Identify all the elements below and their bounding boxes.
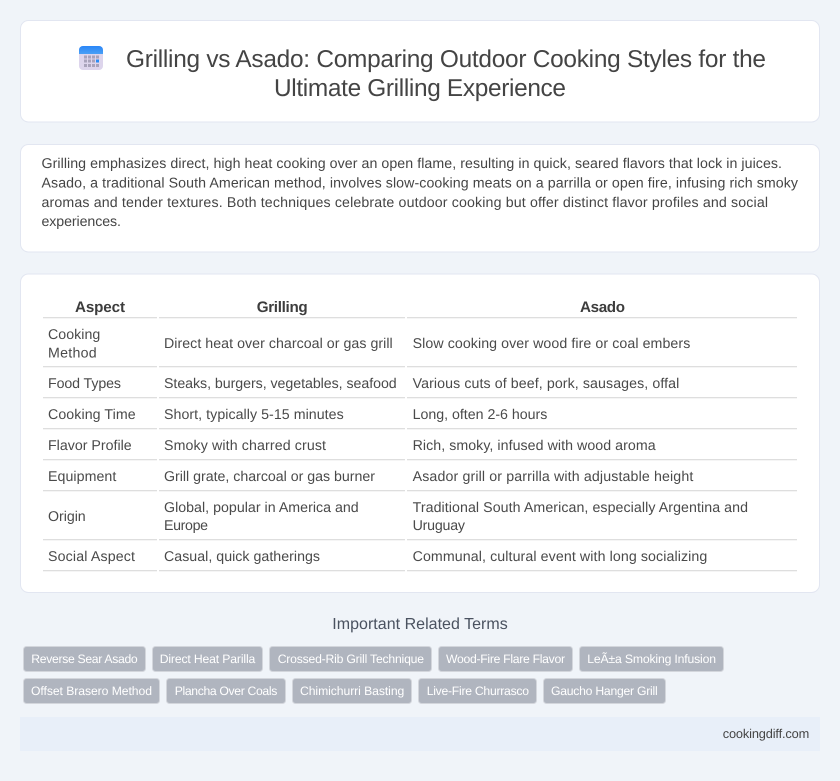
row: social aspect: Casual, quick gatherings bbox=[164, 549, 320, 565]
footer bar bbox=[20, 717, 820, 751]
tag: Chimichurri Basting bbox=[292, 678, 412, 704]
panel: introduction bbox=[20, 144, 820, 252]
tag: Crossed-Rib Grill Technique bbox=[270, 646, 432, 672]
row: social aspect bbox=[48, 549, 707, 565]
tag: Gaucho Hanger Grill: Gaucho Hanger Grill bbox=[551, 684, 658, 698]
panel: comparison table bbox=[20, 274, 820, 592]
panel: related term tags bbox=[24, 646, 724, 704]
text block: introduction paragraph: experiences. bbox=[42, 214, 121, 230]
row: food types: Food Types bbox=[48, 376, 121, 392]
tag: Reverse Sear Asado bbox=[24, 646, 146, 672]
tag: Crossed-Rib Grill Technique: Crossed-Rib Grill Technique bbox=[278, 652, 424, 666]
table grid lines bbox=[43, 317, 797, 571]
row: equipment: Grill grate, charcoal or gas burner bbox=[164, 469, 375, 485]
tag: Gaucho Hanger Grill bbox=[544, 678, 666, 704]
tag: Direct Heat Parilla: Direct Heat Parilla bbox=[160, 652, 256, 666]
title bbox=[126, 46, 766, 102]
tag: Plancha Over Coals bbox=[166, 678, 286, 704]
row: cooking time bbox=[48, 407, 547, 423]
tag: Reverse Sear Asado: Reverse Sear Asado bbox=[31, 652, 138, 666]
tag: Direct Heat Parilla bbox=[152, 646, 262, 672]
row: food types: Steaks, burgers, vegetables, seafood bbox=[164, 376, 397, 392]
row: origin: Europe bbox=[164, 518, 208, 534]
row: cooking method: Direct heat over charcoal or gas grill bbox=[164, 336, 393, 352]
row: cooking time: Cooking Time bbox=[48, 407, 136, 423]
table header row bbox=[75, 299, 625, 316]
row: social aspect: Social Aspect bbox=[48, 549, 135, 565]
row: flavor profile bbox=[48, 438, 656, 454]
panel: title header bbox=[20, 20, 820, 122]
row: flavor profile: Smoky with charred crust bbox=[164, 438, 326, 454]
row: food types: Various cuts of beef, pork, sausages, offal bbox=[413, 376, 679, 392]
row: origin bbox=[48, 500, 748, 534]
row: cooking method: Cooking bbox=[48, 327, 100, 343]
text block: introduction paragraph: aromas and tender textures. Both techniques celebrate outdoor cooking but offer distinct flavor profiles and social bbox=[42, 195, 768, 211]
tag: Plancha Over Coals: Plancha Over Coals bbox=[175, 684, 277, 698]
title: Ultimate Grilling Experience bbox=[274, 75, 566, 102]
row: equipment: Asador grill or parrilla with adjustable height bbox=[413, 469, 693, 485]
row: origin: Global, popular in America and bbox=[164, 500, 359, 516]
row: flavor profile: Rich, smoky, infused with wood aroma bbox=[413, 438, 656, 454]
row: equipment bbox=[48, 469, 693, 485]
row: social aspect: Communal, cultural event with long socializing bbox=[413, 549, 707, 565]
text block: introduction paragraph bbox=[42, 156, 799, 230]
tag: Leña Smoking Infusion bbox=[580, 646, 724, 672]
row: food types bbox=[48, 376, 679, 392]
table header row: Asado bbox=[580, 299, 625, 316]
tag: Live-Fire Churrasco: Live-Fire Churrasco bbox=[427, 684, 529, 698]
row: origin: Uruguay bbox=[413, 518, 466, 534]
row: cooking time: Short, typically 5-15 minutes bbox=[164, 407, 344, 423]
title: Grilling vs Asado: Comparing Outdoor Cooking Styles for the bbox=[126, 46, 766, 73]
row: cooking method bbox=[48, 327, 690, 362]
table header row: Aspect bbox=[75, 299, 125, 316]
footer source text: cookingdiff.com bbox=[723, 726, 809, 741]
tag: Chimichurri Basting: Chimichurri Basting bbox=[300, 684, 404, 698]
icon: calendar bbox=[79, 46, 103, 70]
row: origin: Traditional South American, especially Argentina and bbox=[413, 500, 748, 516]
tag: Leña Smoking Infusion: LeÃ±a Smoking Infusion bbox=[587, 652, 716, 666]
tag: Offset Brasero Method: Offset Brasero Method bbox=[31, 684, 152, 698]
tag: Live-Fire Churrasco bbox=[418, 678, 536, 704]
heading: related terms: Important Related Terms bbox=[332, 616, 508, 633]
row: origin: Origin bbox=[48, 509, 86, 525]
row: flavor profile: Flavor Profile bbox=[48, 438, 132, 454]
row: cooking method: Method bbox=[48, 346, 97, 362]
row: cooking method: Slow cooking over wood fire or coal embers bbox=[413, 336, 690, 352]
tag: Wood-Fire Flare Flavor: Wood-Fire Flare Flavor bbox=[446, 652, 565, 666]
text block: introduction paragraph: Grilling emphasizes direct, high heat cooking over an open flame, resulting in quick, seared flavors that lock in juices. bbox=[42, 156, 782, 172]
text block: introduction paragraph: Asado, a traditional South American method, involves slow-cooking meats on a parrilla or open fire, infusing rich smoky bbox=[42, 176, 799, 192]
table header row: Grilling bbox=[257, 299, 308, 316]
tag: Wood-Fire Flare Flavor bbox=[438, 646, 572, 672]
tag: Offset Brasero Method bbox=[24, 678, 160, 704]
row: cooking time: Long, often 2-6 hours bbox=[413, 407, 547, 423]
row: equipment: Equipment bbox=[48, 469, 116, 485]
